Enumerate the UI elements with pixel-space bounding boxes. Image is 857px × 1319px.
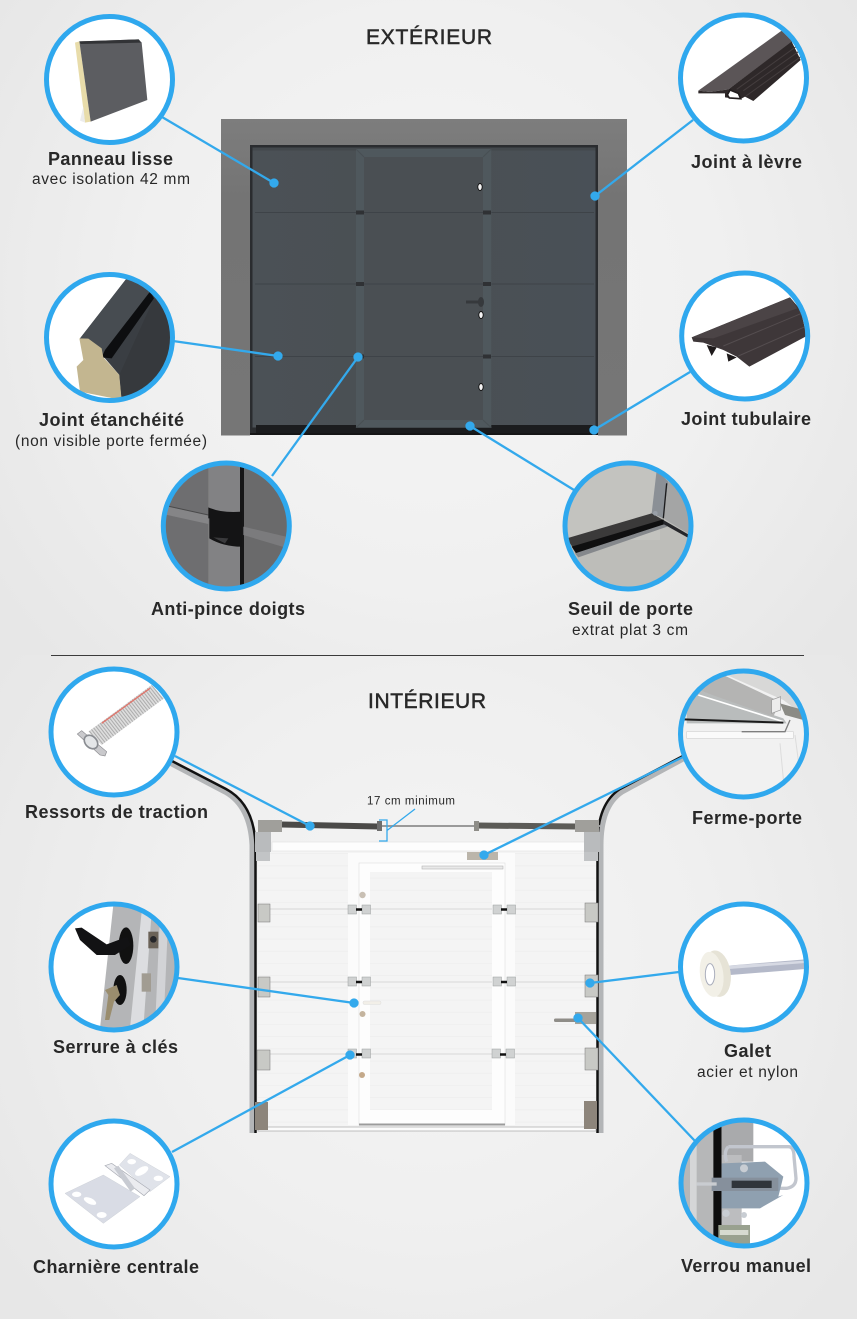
handle and keyholes [466, 184, 484, 390]
label: charnière centrale: Charnière centrale [33, 1257, 199, 1277]
icon: joint à lèvre [680, 15, 806, 141]
icon: joint étanchéité [46, 274, 177, 403]
panel: exterior garage door [221, 119, 627, 436]
annotation: 17 cm minimum [367, 796, 455, 841]
label: acier et nylon: acier et nylon [697, 1064, 798, 1081]
opening shadow [250, 145, 598, 435]
label: serrure à clés: Serrure à clés [53, 1037, 178, 1057]
manual bolt [554, 1012, 596, 1024]
hinges [255, 852, 598, 1130]
label: joint tubulaire: Joint tubulaire [681, 409, 811, 429]
pedestrian door frame [356, 149, 491, 428]
pedestrian door [348, 853, 515, 1126]
label: galet: Galet [724, 1041, 771, 1061]
heading: intérieur: INTÉRIEUR [368, 690, 486, 713]
icon: charnière centrale [51, 1121, 177, 1247]
label: joint à lèvre: Joint à lèvre [691, 152, 802, 172]
label: anti-pince doigts: Anti-pince doigts [151, 599, 305, 619]
label: seuil de porte: Seuil de porte [568, 599, 693, 619]
label: verrou manuel: Verrou manuel [681, 1256, 811, 1276]
annotation: 17 cm minimum: 17 cm minimum [367, 796, 455, 808]
icon: ferme-porte [680, 670, 810, 798]
label: isolation: avec isolation 42 mm [32, 171, 190, 188]
wall frame [221, 119, 627, 436]
callout lines: interior [172, 756, 695, 1152]
label: ressorts de traction: Ressorts de traction [25, 802, 208, 822]
callout lines: exterior [162, 117, 693, 490]
label: joint étanchéité: Joint étanchéité [39, 410, 184, 430]
icon: ressorts de traction [51, 669, 177, 795]
door panels [252, 148, 596, 428]
divider [51, 655, 804, 656]
header bar [272, 842, 595, 851]
icon: seuil de porte [560, 460, 693, 589]
icon: verrou manuel [680, 1118, 807, 1252]
label: non visible: (non visible porte fermée) [15, 433, 207, 450]
label: ferme-porte: Ferme-porte [692, 808, 802, 828]
icon: panneau lisse [46, 16, 172, 142]
door panels [258, 850, 596, 1128]
icon: galet [680, 904, 806, 1030]
vertical tracks [168, 756, 685, 1133]
panel: interior garage door [168, 756, 685, 1133]
icon: serrure à clés [51, 904, 180, 1030]
icon: joint tubulaire [682, 273, 808, 399]
heading: extérieur: EXTÉRIEUR [366, 26, 492, 49]
door closer [422, 852, 503, 869]
label: panneau lisse: Panneau lisse [48, 149, 173, 169]
icon: anti-pince doigts [160, 460, 293, 593]
torsion shaft and springs [255, 820, 600, 852]
label: extra plat: extrat plat 3 cm [572, 622, 688, 639]
